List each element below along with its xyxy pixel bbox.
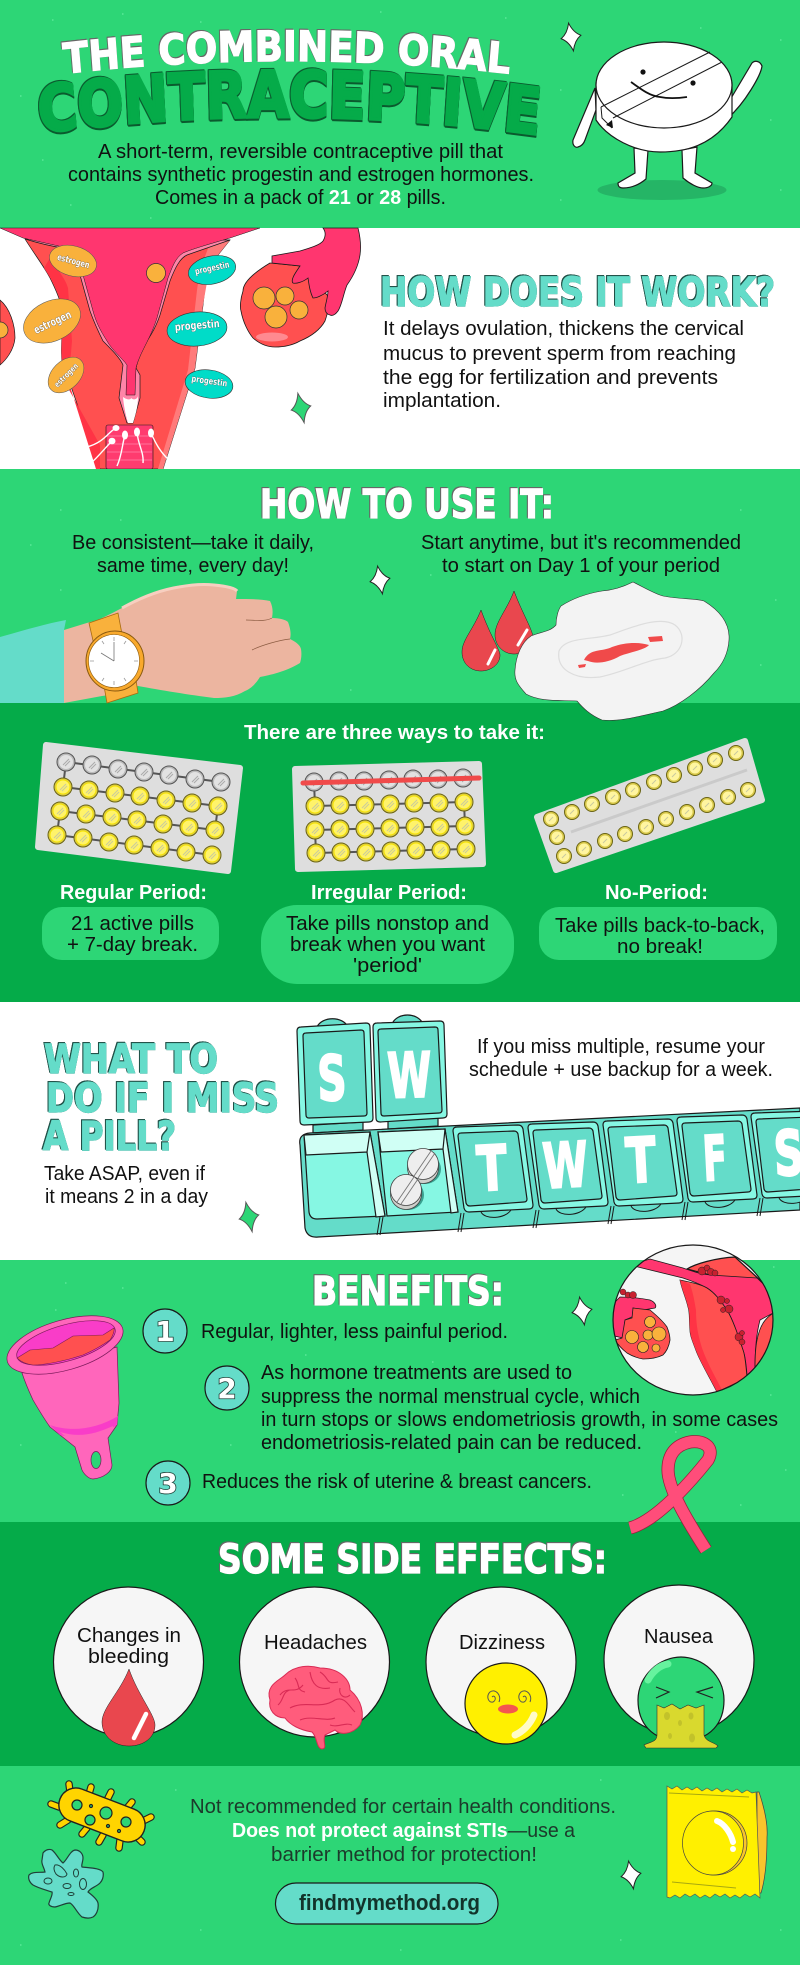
benefit 3: Reduces the risk of uterine & breast cancers.: [202, 1471, 592, 1493]
illustration: ovary and fallopian tube: [240, 228, 361, 347]
panel: benefits: [0, 1245, 800, 1550]
heading: what to do if I miss a pill: [43, 1037, 279, 1160]
heading: what to do if I miss a pill: WHAT TO: [44, 1037, 218, 1083]
text: how it works explanation: [383, 318, 744, 412]
heading: what to do if I miss a pill: A PILL?: [43, 1114, 176, 1160]
illustration: weekly pill organizer: T: [624, 1123, 658, 1198]
text: not recommended warning: Not recommended for certain health conditions.: [190, 1796, 616, 1818]
option: irregular period: Irregular Period:: [311, 882, 467, 904]
icon: teal amoeba: [29, 1849, 103, 1918]
benefit 1: [143, 1309, 508, 1353]
side effect: headaches: [240, 1587, 390, 1749]
illustration: weekly pill organizer: T: [475, 1131, 509, 1206]
title: contraceptive: CONTRACEPTIVE: [38, 67, 540, 138]
side effect: changes in bleeding: bleeding: [88, 1646, 169, 1668]
illustration: uterus: estrogen: [32, 308, 74, 337]
title: the combined oral: THE COMBINED ORAL: [60, 28, 510, 74]
benefit 2: As hormone treatments are used to: [261, 1362, 572, 1384]
illustration: uterus: [0, 228, 260, 469]
heading: what to do if I miss a pill: DO IF I MISS: [46, 1076, 279, 1122]
panel: header: [20, 11, 782, 219]
illustration: endometriosis circle: [610, 1245, 780, 1395]
text: if you miss multiple: [469, 1036, 773, 1081]
side effect: dizziness: Dizziness: [459, 1632, 545, 1654]
text: be consistent: [72, 532, 314, 577]
option: regular period: 21 active pills: [71, 913, 194, 935]
illustration: weekly pill organizer: [297, 1015, 800, 1237]
side effect: changes in bleeding: [54, 1587, 204, 1746]
icon: green sparkle: [236, 1200, 262, 1234]
panel: footer: [0, 1766, 800, 1965]
option: irregular period: break when you want: [290, 934, 485, 956]
text: be consistent: same time, every day!: [97, 555, 289, 577]
illustration: irregular pill pack: [295, 764, 483, 869]
text: start anytime: to start on Day 1 of your period: [442, 555, 720, 577]
panel: how to use it: [0, 469, 800, 720]
intro text: contains synthetic progestin and estrogen hormones.: [68, 164, 534, 186]
panel: three ways to take it: [0, 703, 800, 1002]
icon: blood drops: [462, 591, 533, 671]
option: no period: Take pills back-to-back,: [555, 915, 765, 937]
side effect: nausea: Nausea: [644, 1626, 714, 1648]
text: if you miss multiple: If you miss multiple, resume your: [477, 1036, 765, 1058]
text: if you miss multiple: schedule + use backup for a week.: [469, 1059, 773, 1081]
text: take ASAP: it means 2 in a day: [45, 1186, 208, 1208]
option: irregular period: 'period': [353, 955, 422, 977]
text: how it works explanation: mucus to prevent sperm from reaching: [383, 343, 736, 365]
illustration: regular pill pack: [38, 745, 240, 871]
option: irregular period: [261, 882, 514, 984]
benefit 2: suppress the normal menstrual cycle, which: [261, 1386, 640, 1408]
illustration: weekly pill organizer: F: [701, 1121, 729, 1196]
benefit 1: Regular, lighter, less painful period.: [201, 1321, 508, 1343]
text: start anytime: [421, 532, 741, 577]
illustration: menstrual cup: [0, 1304, 130, 1479]
text: take ASAP: [44, 1163, 208, 1208]
benefit 2: 2: [217, 1372, 237, 1405]
benefit 3: 3: [158, 1467, 178, 1500]
illustration: pad with blood: [515, 582, 729, 720]
illustration: weekly pill organizer: W: [541, 1128, 590, 1203]
benefit 2: in turn stops or slows endometriosis growth, in some cases: [261, 1409, 778, 1431]
option: irregular period: Take pills nonstop and: [286, 913, 489, 935]
heading: some side effects: SOME SIDE EFFECTS:: [218, 1537, 607, 1583]
illustration: wrist with watch: [0, 584, 301, 703]
icon: sparkle: [559, 21, 583, 53]
illustration: no-period pill pack: [537, 741, 762, 870]
option: no period: No-Period:: [605, 882, 708, 904]
icon: sparkle: [619, 1859, 643, 1891]
heading: benefits: BENEFITS:: [312, 1269, 504, 1315]
intro text: Comes in a pack of 21 or 28 pills.: [155, 187, 446, 209]
text: take ASAP: Take ASAP, even if: [44, 1163, 205, 1185]
illustration: weekly pill organizer: S: [316, 1042, 347, 1115]
option: regular period: [42, 882, 219, 960]
icon: awareness ribbon: [630, 1442, 710, 1550]
text: three ways heading: There are three ways to take it:: [244, 722, 545, 744]
icon: sparkle: [368, 564, 392, 596]
benefit 2: endometriosis-related pain can be reduced.: [261, 1432, 642, 1454]
benefit 3: [146, 1461, 592, 1505]
benefit 2: [205, 1362, 778, 1454]
text: how it works explanation: It delays ovulation, thickens the cervical: [383, 318, 744, 340]
intro text: [68, 141, 534, 209]
side effect: nausea: [604, 1585, 754, 1748]
side effect: headaches: Headaches: [264, 1632, 367, 1654]
intro text: A short-term, reversible contraceptive pill that: [98, 141, 503, 163]
panel: what to do if I miss a pill: [0, 1002, 800, 1260]
button: findmymethod.org: findmymethod.org: [299, 1890, 480, 1915]
benefit 1: 1: [155, 1315, 175, 1348]
heading: how to use it: HOW TO USE IT:: [260, 482, 554, 528]
illustration: weekly pill organizer: W: [386, 1038, 432, 1113]
illustration: uterus: progestin: [194, 260, 230, 277]
text: be consistent: Be consistent—take it daily,: [72, 532, 314, 554]
side effect: dizziness: [426, 1587, 576, 1744]
icon: yellow bacterium: [51, 1783, 151, 1848]
icon: green sparkle: [288, 391, 314, 425]
illustration: uterus: progestin: [174, 317, 220, 334]
option: no period: [539, 882, 777, 960]
panel: side effects: [0, 1522, 800, 1766]
side effect: changes in bleeding: Changes in: [77, 1625, 181, 1647]
illustration: uterus: estrogen: [53, 361, 80, 389]
button: findmymethod.org: [276, 1883, 498, 1924]
option: regular period: + 7-day break.: [67, 934, 198, 956]
option: no period: no break!: [617, 936, 703, 958]
text: not recommended warning: barrier method for protection!: [271, 1844, 537, 1866]
option: regular period: Regular Period:: [60, 882, 207, 904]
icon: condom wrapper: [667, 1786, 767, 1898]
illustration: uterus: estrogen: [56, 253, 90, 271]
text: not recommended warning: [190, 1796, 616, 1866]
illustration: uterus: progestin: [191, 375, 228, 389]
text: not recommended warning: Does not protect against STIs—use a: [232, 1820, 576, 1842]
text: how it works explanation: the egg for fertilization and prevents: [383, 367, 718, 389]
text: how it works explanation: implantation.: [383, 390, 501, 412]
panel: how does it work: [0, 228, 800, 469]
icon: pill character: [573, 42, 762, 200]
text: start anytime: Start anytime, but it's recommended: [421, 532, 741, 554]
icon: sparkle: [570, 1295, 594, 1327]
